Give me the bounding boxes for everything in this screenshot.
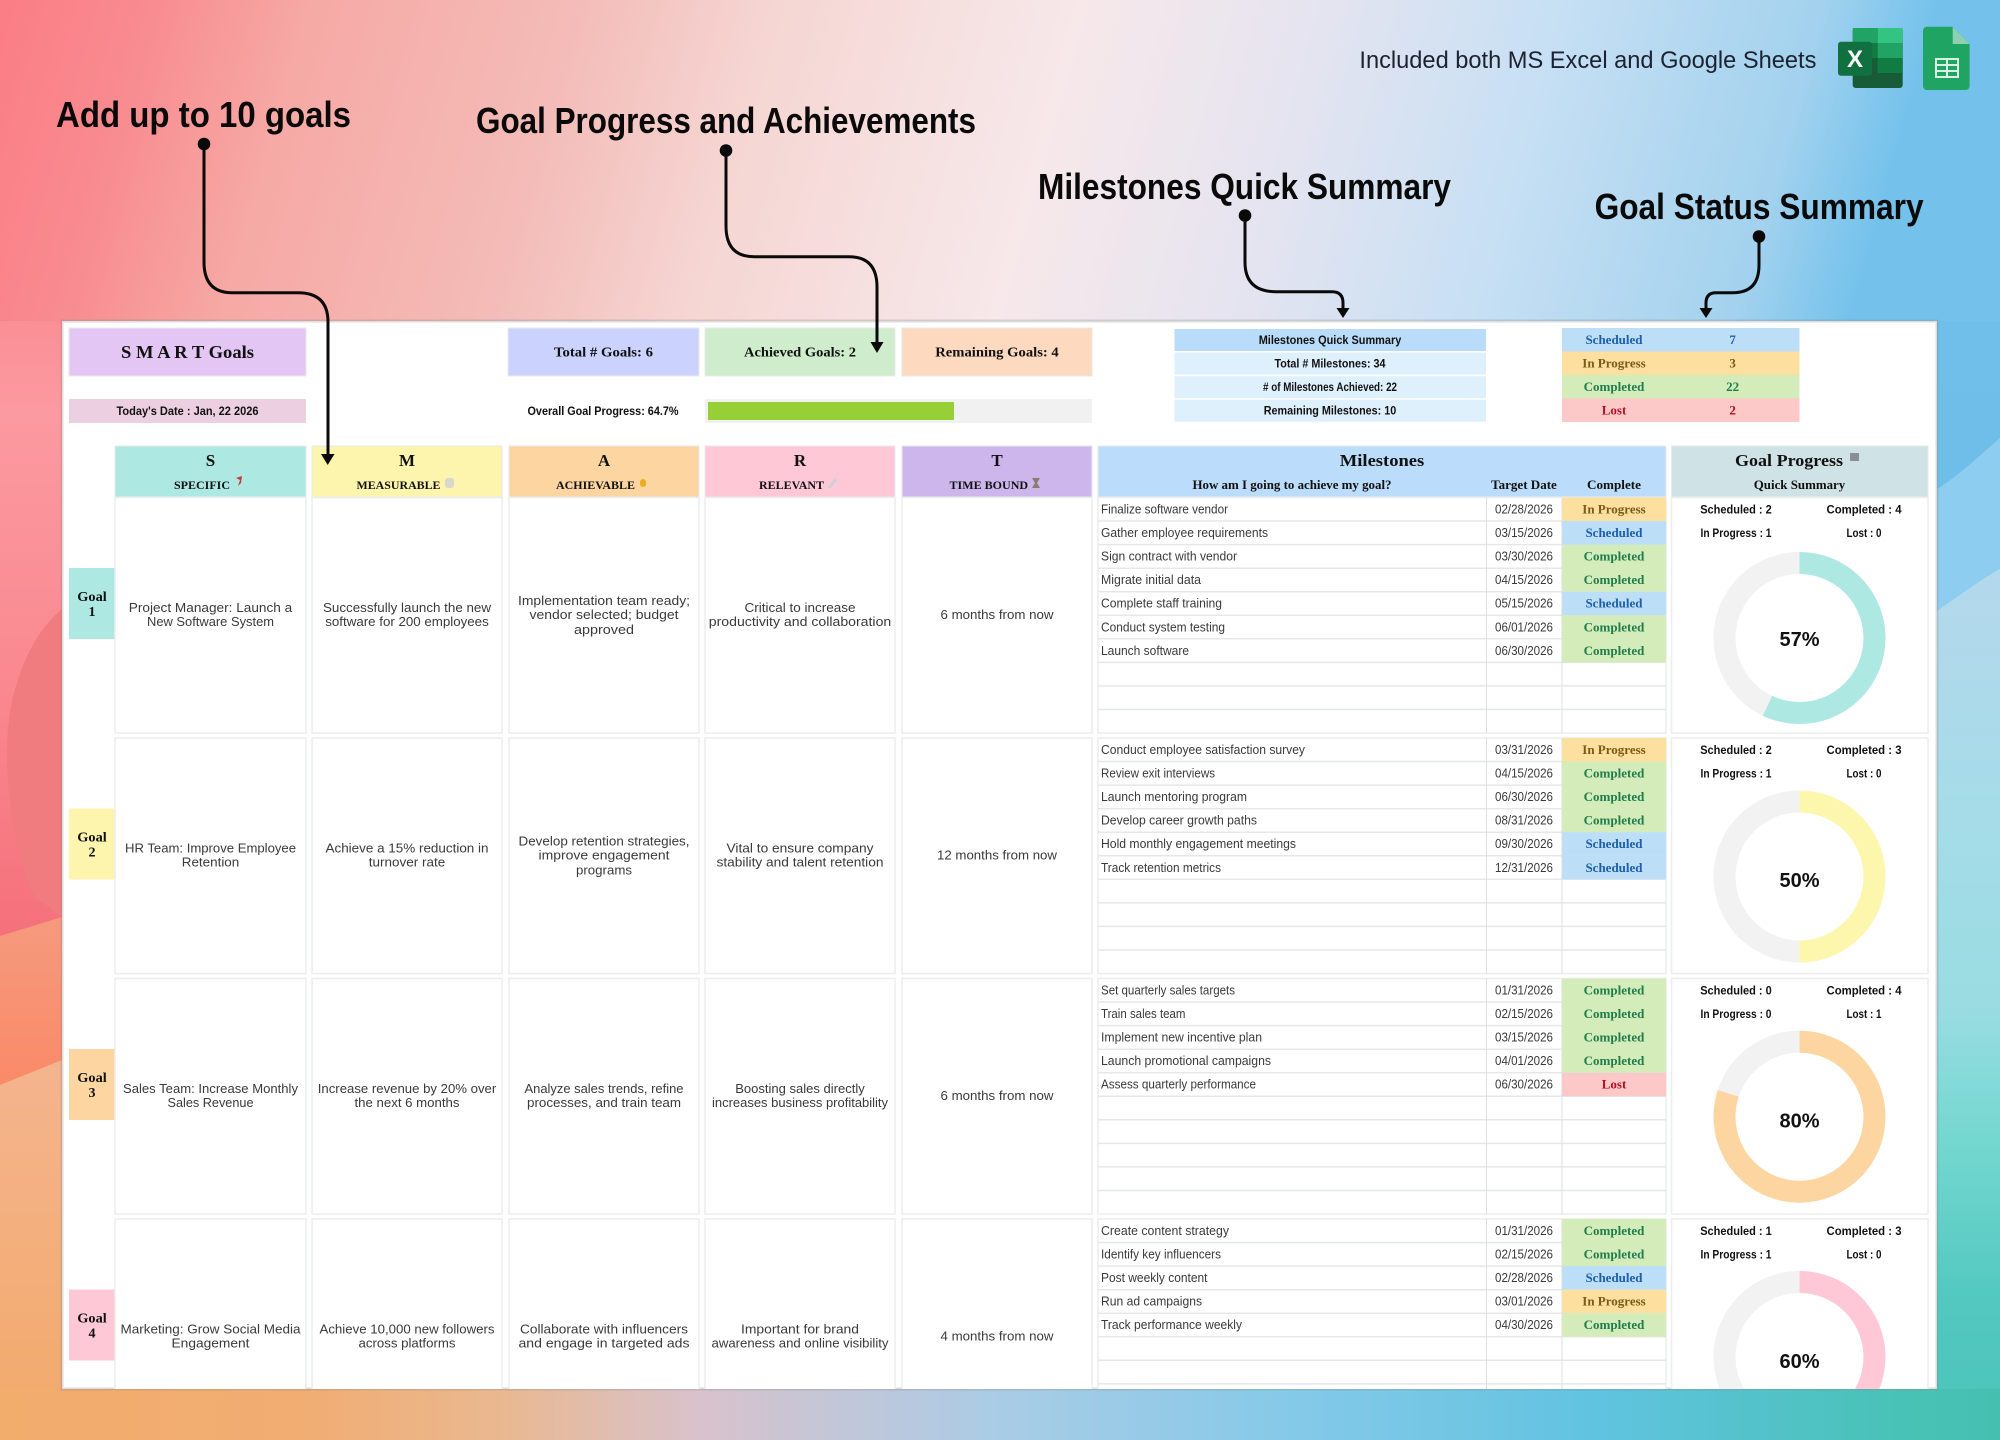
goal 1 time bound [902, 498, 1092, 733]
goal 3 achievable [509, 978, 699, 1214]
goal 1 milestones: 04/15/2026 [1495, 573, 1553, 587]
goal status summary table: 22 [1726, 379, 1739, 394]
header: relevant: RELEVANT [759, 480, 824, 492]
goal 2 time bound: 12 months from now [937, 848, 1058, 862]
goal 4 milestones: Completed [1584, 1223, 1645, 1238]
goal 4 donut [1724, 1282, 1874, 1432]
goal 4 milestones: In Progress [1582, 1294, 1646, 1309]
goal 2 milestones: Hold monthly engagement meetings [1101, 837, 1296, 851]
header: specific: SPECIFIC [174, 480, 230, 492]
goal 1 milestones: Gather employee requirements [1101, 526, 1268, 540]
goal 1 milestones: 05/15/2026 [1495, 597, 1553, 611]
goal 3 relevant: increases business profitability [712, 1095, 888, 1110]
goal 3 label: Goal [77, 1071, 107, 1086]
goal 3 milestones: Set quarterly sales targets [1101, 984, 1235, 998]
goal 1 specific: New Software System [147, 614, 274, 629]
goal 1 progress card: Completed : 4 [1826, 502, 1902, 516]
goal 3 row [69, 978, 1928, 1214]
goal 4 milestones: Completed [1584, 1246, 1645, 1262]
title cell [69, 328, 306, 376]
goal 2 time bound [902, 738, 1092, 974]
goal 2 milestones: Completed [1584, 813, 1645, 828]
goal status summary table: Completed [1584, 379, 1645, 394]
goal 4 milestones: Create content strategy [1101, 1224, 1230, 1238]
goal 1 achievable: Implementation team ready; [518, 593, 690, 608]
goal 2 milestones: In Progress [1582, 742, 1646, 757]
goal 3 progress card [1672, 978, 1928, 1214]
stat: remaining goals [902, 328, 1092, 376]
goal 4 achievable [508, 1218, 700, 1389]
goal 2 relevant [705, 738, 895, 974]
goal 1 row [69, 498, 1928, 733]
header: specific [115, 446, 306, 497]
header: relevant: R [794, 451, 807, 470]
goal 3 milestones: 01/31/2026 [1495, 984, 1553, 998]
goal 4 label: Goal [77, 1312, 107, 1326]
goal 2 donut [1724, 802, 1874, 952]
goal 3 milestones: Implement new incentive plan [1101, 1031, 1262, 1045]
goal 4 milestones: Scheduled [1585, 1270, 1643, 1285]
goal 3 specific: Sales Revenue [168, 1095, 254, 1110]
goal status summary table: 7 [1729, 332, 1736, 347]
goal 3 specific: Sales Team: Increase Monthly [123, 1081, 298, 1096]
goal 4 progress card: Scheduled : 1 [1700, 1224, 1772, 1238]
goal 4 progress card [1670, 1218, 1929, 1389]
goal 2 progress card: Scheduled : 2 [1700, 743, 1772, 757]
goal 1 time bound: 6 months from now [940, 607, 1054, 622]
goal 4 label [69, 1290, 115, 1360]
goal 4 achievable: and engage in targeted ads [518, 1336, 690, 1350]
stat: achieved goals: Achieved Goals: 2 [744, 346, 856, 360]
goal 1 milestones: Completed [1584, 643, 1645, 658]
goal 2 relevant: Vital to ensure company [726, 840, 874, 856]
goal 4 time bound [901, 1218, 1093, 1389]
arrow: goal progress to achieved goals [720, 144, 884, 353]
goal status summary table: In Progress [1582, 356, 1646, 371]
goal 3 time bound [902, 978, 1092, 1214]
milestones quick summary table: Milestones Quick Summary [1259, 333, 1402, 347]
goal 2 achievable [509, 738, 699, 974]
goal 2 achievable: Develop retention strategies, [518, 834, 690, 848]
goal 1 achievable: approved [574, 622, 634, 637]
goal 1 label: Goal [77, 590, 107, 605]
goal 1 milestones: 03/30/2026 [1495, 550, 1553, 564]
title cell: S M A R T Goals [121, 342, 254, 362]
goal 1 donut [1724, 563, 1874, 713]
goal 3 progress card: Completed : 4 [1826, 984, 1902, 998]
goal status summary table: 3 [1729, 356, 1736, 371]
header: relevant [705, 446, 895, 497]
goal 3 milestones: 04/01/2026 [1495, 1054, 1553, 1068]
header: time bound [902, 446, 1092, 497]
milestones quick summary table: Remaining Milestones: 10 [1264, 404, 1397, 418]
goal 1 measurable [312, 498, 502, 733]
goal 3 milestones: Completed [1584, 982, 1645, 998]
goal 3 milestones: Completed [1584, 1006, 1645, 1021]
goal 2 milestones: Scheduled [1585, 836, 1643, 851]
goal 2 label: 2 [88, 846, 96, 860]
goal 3 measurable: Increase revenue by 20% over [318, 1081, 497, 1096]
header: time bound: TIME BOUND [950, 480, 1028, 492]
goal 2 label [69, 808, 115, 880]
goal 4 milestones: Run ad campaigns [1101, 1295, 1202, 1309]
goal 2 milestones: Track retention metrics [1101, 861, 1221, 875]
goal 4 measurable: across platforms [358, 1336, 456, 1350]
goal 1 donut: 57% [1779, 629, 1820, 651]
header: achievable: A [598, 451, 611, 470]
header: milestones: Complete [1587, 477, 1641, 492]
goal 4 achievable: Collaborate with influencers [520, 1322, 689, 1336]
goal 4 milestones: Completed [1584, 1317, 1645, 1332]
goal 4 milestones: 02/15/2026 [1495, 1248, 1553, 1262]
goal 4 time bound: 4 months from now [940, 1328, 1054, 1344]
goal 4 milestones: Post weekly content [1101, 1271, 1208, 1285]
goal 1 milestones: 02/28/2026 [1495, 502, 1553, 516]
header: milestones: How am I going to achieve my goal? [1192, 477, 1392, 492]
goal 3 milestones: 02/15/2026 [1495, 1007, 1553, 1021]
goal 3 milestones: Launch promotional campaigns [1101, 1054, 1271, 1068]
goal 1 milestones: Sign contract with vendor [1101, 550, 1237, 564]
milestones quick summary table: Total # Milestones: 34 [1274, 357, 1386, 371]
goal 3 measurable: the next 6 months [354, 1095, 460, 1110]
goal 4 progress card: Lost : 0 [1846, 1248, 1882, 1262]
header: time bound: T [991, 451, 1003, 470]
goal 1 relevant: Critical to increase [744, 600, 856, 615]
goal 4 progress card: In Progress : 1 [1700, 1248, 1772, 1262]
goal 1 milestones: Completed [1584, 572, 1645, 587]
milestones quick summary table [1174, 329, 1486, 422]
panel: spreadsheet [62, 321, 1937, 1389]
goal 3 milestones: 06/30/2026 [1495, 1078, 1553, 1092]
goal 4 milestones: Identify key influencers [1101, 1248, 1221, 1262]
icon: Google Sheets [1923, 27, 1970, 90]
date cell: Today's Date : Jan, 22 2026 [116, 404, 259, 418]
overall progress: Overall Goal Progress: 64.7% [528, 404, 679, 418]
goal 4 milestones: 04/30/2026 [1495, 1318, 1553, 1332]
goal 1 relevant [705, 498, 895, 733]
goal 4 milestones: 03/01/2026 [1495, 1295, 1553, 1309]
header: goal progress [1672, 446, 1928, 497]
goal 1 milestones: Completed [1584, 619, 1645, 634]
goal 1 achievable [509, 498, 699, 733]
goal 2 milestones: Develop career growth paths [1101, 814, 1257, 828]
goal rows [69, 498, 1928, 1440]
goal 1 label: 1 [88, 605, 96, 620]
goal 1 measurable: Successfully launch the new [323, 600, 492, 615]
goal 1 milestones: Launch software [1101, 644, 1189, 658]
icon: Excel [1838, 28, 1903, 88]
goal 3 progress card: Lost : 1 [1846, 1007, 1882, 1021]
goal 4 relevant: awareness and online visibility [712, 1336, 889, 1350]
goal 1 achievable: vendor selected; budget [530, 607, 679, 622]
goal 2 label: Goal [77, 830, 107, 846]
arrow: milestones quick summary [1239, 209, 1350, 318]
goal 3 achievable: Analyze sales trends, refine [524, 1081, 684, 1096]
annotation: milestones quick summary: Milestones Quick Summary [1038, 166, 1451, 207]
goal 2 milestones: 04/15/2026 [1495, 766, 1553, 780]
goal 4 milestones: 02/28/2026 [1495, 1271, 1553, 1285]
goal 2 achievable: programs [576, 862, 632, 878]
goal 3 relevant: Boosting sales directly [735, 1081, 865, 1096]
goal 1 progress card: In Progress : 1 [1700, 526, 1772, 540]
goal 2 measurable [312, 738, 502, 974]
goal 4 measurable: Achieve 10,000 new followers [320, 1322, 495, 1336]
goal 4 specific [114, 1218, 307, 1389]
header: measurable: MEASURABLE [356, 480, 441, 492]
goal 1 milestones: Migrate initial data [1101, 573, 1201, 587]
goal 1 progress card: Scheduled : 2 [1700, 502, 1772, 516]
annotation: goal status summary: Goal Status Summary [1595, 186, 1924, 227]
goal 2 specific: HR Team: Improve Employee [125, 840, 296, 856]
goal 2 measurable: turnover rate [369, 854, 445, 870]
goal 2 milestones: Completed [1584, 766, 1645, 780]
goal status summary table: Scheduled [1585, 332, 1643, 347]
goal 1 progress card: Lost : 0 [1846, 526, 1882, 540]
header: specific: S [206, 451, 215, 470]
goal 1 progress card [1672, 498, 1928, 733]
goal 3 relevant [705, 978, 895, 1214]
goal 1 milestones: Complete staff training [1101, 597, 1222, 611]
goal 2 milestones: Launch mentoring program [1101, 790, 1247, 804]
goal 1 specific [115, 498, 306, 733]
goal 1 specific: Project Manager: Launch a [129, 600, 293, 615]
goal 4 relevant: Important for brand [741, 1322, 859, 1336]
goal 3 measurable [312, 978, 502, 1214]
goal 4 milestones: Track performance weekly [1101, 1318, 1243, 1332]
goal 2 milestones: 12/31/2026 [1495, 861, 1553, 875]
goal 2 milestones: 06/30/2026 [1495, 790, 1553, 804]
goal 3 donut [1724, 1042, 1874, 1192]
goal 1 milestones: 06/30/2026 [1495, 644, 1553, 658]
arrow: add up to 10 goals to measurable column [198, 138, 334, 465]
goal status summary table [1562, 328, 1800, 422]
header: milestones: Target Date [1491, 477, 1557, 492]
goal 4 specific: Engagement [172, 1336, 250, 1350]
goal 3 milestones: Assess quarterly performance [1101, 1078, 1256, 1092]
goal 3 label [69, 1049, 115, 1120]
goal 3 specific [115, 978, 306, 1214]
annotation: goal progress and achievements: Goal Progress and Achievements [476, 100, 976, 141]
goal 2 milestones: 08/31/2026 [1495, 814, 1553, 828]
goal 3 milestones: Completed [1584, 1030, 1645, 1045]
goal 1 measurable: software for 200 employees [325, 614, 489, 629]
goal 3 milestones: Train sales team [1101, 1007, 1186, 1021]
goal 4 measurable [311, 1218, 503, 1389]
goal 2 milestones: Conduct employee satisfaction survey [1101, 743, 1306, 757]
header: achievable [509, 446, 699, 497]
goal 3 label: 3 [88, 1086, 96, 1101]
format note: Included both MS Excel and Google Sheets [1359, 47, 1816, 74]
goal 4 specific: Marketing: Grow Social Media [120, 1322, 301, 1336]
goal 3 progress card: In Progress : 0 [1700, 1007, 1772, 1021]
goal 1 milestones: Scheduled [1585, 525, 1643, 540]
goal 4 progress card: Completed : 3 [1826, 1224, 1902, 1238]
goal 4 row [69, 1218, 1929, 1389]
goal 3 achievable: processes, and train team [527, 1095, 681, 1110]
header: milestones [1098, 446, 1666, 497]
goal 3 time bound: 6 months from now [940, 1088, 1054, 1103]
goal 2 donut: 50% [1779, 870, 1820, 892]
goal 2 milestones: Scheduled [1585, 860, 1643, 875]
goal 2 milestones: Completed [1584, 789, 1645, 804]
goal status summary table: 2 [1729, 403, 1736, 418]
stat: total goals: Total # Goals: 6 [554, 346, 653, 360]
goal 1 milestones: Scheduled [1585, 596, 1643, 611]
goal 3 milestones [1098, 978, 1666, 1214]
header: milestones: Milestones [1340, 451, 1425, 470]
goal 1 milestones: Finalize software vendor [1101, 502, 1228, 516]
arrow: goal status summary [1700, 230, 1765, 318]
goal 4 milestones: 01/31/2026 [1495, 1224, 1553, 1238]
stat: total goals [508, 328, 699, 376]
goal 2 milestones: Review exit interviews [1101, 766, 1215, 780]
goal 3 donut: 80% [1779, 1111, 1820, 1133]
goal 3 progress card: Scheduled : 0 [1700, 984, 1772, 998]
goal 1 label [69, 568, 115, 639]
overall progress [528, 399, 1092, 423]
goal 1 milestones: Conduct system testing [1101, 620, 1225, 634]
goal 1 milestones: Completed [1584, 549, 1645, 564]
milestones quick summary table: # of Milestones Achieved: 22 [1263, 380, 1397, 394]
goal 2 milestones [1098, 738, 1666, 974]
icon: Excel: X [1847, 46, 1863, 73]
goal 2 specific: Retention [182, 854, 239, 870]
header: measurable [312, 446, 502, 497]
goal 2 row [69, 738, 1928, 974]
goal 2 progress card [1672, 738, 1928, 974]
goal 2 specific [115, 738, 306, 974]
header: goal progress: Quick Summary [1754, 478, 1846, 492]
goal 2 progress card: In Progress : 1 [1700, 766, 1772, 780]
annotation: add up to 10 goals: Add up to 10 goals [56, 94, 351, 135]
stat: remaining goals: Remaining Goals: 4 [935, 346, 1059, 360]
goal 1 milestones: 06/01/2026 [1495, 620, 1553, 634]
header: achievable: ACHIEVABLE [556, 480, 635, 492]
goal 2 progress card: Lost : 0 [1846, 766, 1882, 780]
header: measurable: M [399, 451, 415, 470]
goal 2 measurable: Achieve a 15% reduction in [326, 840, 488, 856]
goal 1 relevant: productivity and collaboration [709, 614, 891, 629]
goal 4 relevant [704, 1218, 896, 1389]
goal 4 donut: 60% [1779, 1351, 1820, 1373]
date cell [69, 399, 306, 423]
goal 4 milestones [1097, 1218, 1667, 1389]
goal 2 progress card: Completed : 3 [1826, 743, 1902, 757]
goal 2 achievable: improve engagement [538, 848, 670, 862]
goal status summary table: Lost [1602, 403, 1627, 418]
goal 1 milestones: In Progress [1582, 502, 1646, 516]
header: goal progress: Goal Progress [1735, 451, 1843, 470]
goal 4 label: 4 [88, 1326, 96, 1342]
goal 2 milestones: 03/31/2026 [1495, 743, 1553, 757]
goal 2 milestones: 09/30/2026 [1495, 837, 1553, 851]
goal 1 milestones: 03/15/2026 [1495, 526, 1553, 540]
goal 3 milestones: 03/15/2026 [1495, 1031, 1553, 1045]
stat: achieved goals [705, 328, 895, 376]
goal 3 milestones: Lost [1602, 1077, 1627, 1092]
goal 1 milestones [1098, 498, 1666, 733]
goal 2 relevant: stability and talent retention [716, 854, 884, 870]
goal 3 milestones: Completed [1584, 1053, 1645, 1068]
